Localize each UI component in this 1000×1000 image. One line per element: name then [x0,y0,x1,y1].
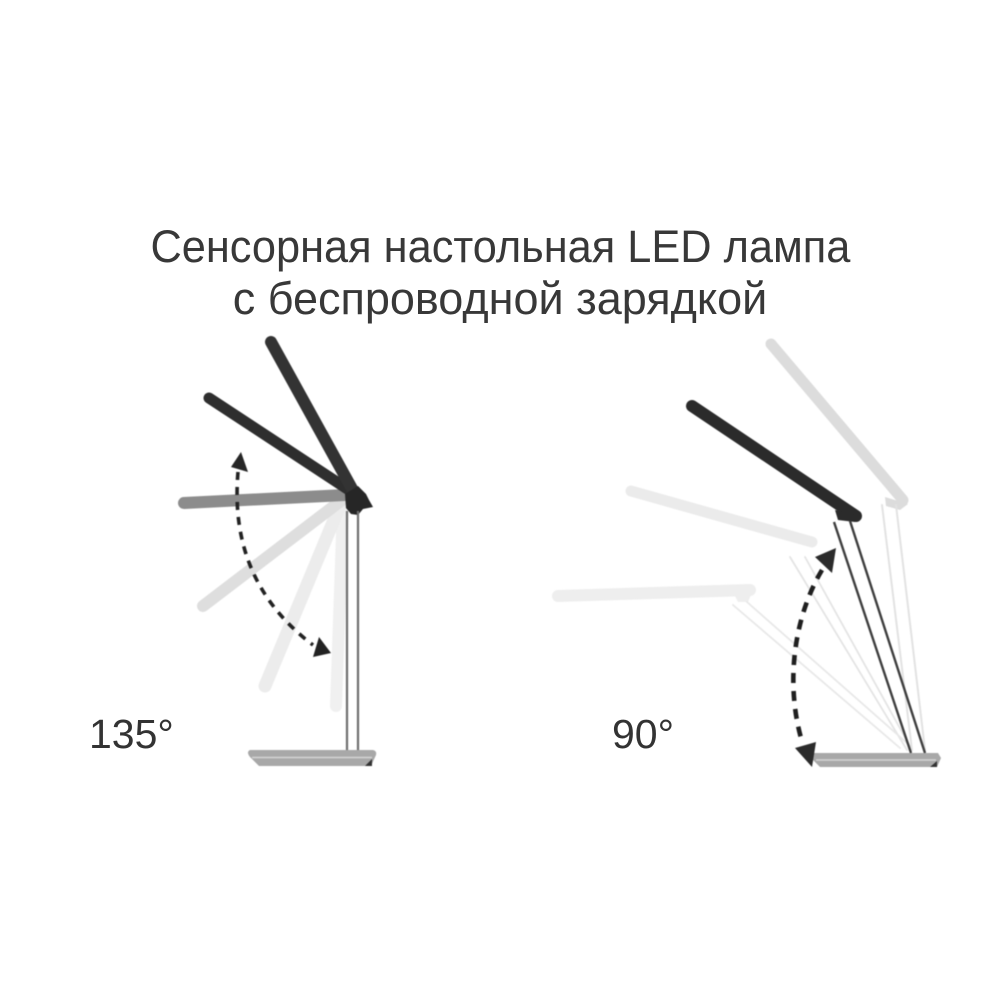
lamp 135: base [248,750,376,766]
lamp 135: arrow [231,452,331,657]
lamp 135: stand [347,511,358,751]
title: Сенсорная настольная LED лампа [150,221,850,272]
lamp 90: faded positions [558,344,925,750]
title: с беспроводной зарядкой [233,273,767,324]
title [150,221,850,324]
lamp 90: active position [692,406,925,753]
angle label 135: 135° [89,711,174,757]
angle label 90: 90° [612,711,674,757]
lamp 90: arrow [793,548,836,767]
lamp 90: base [812,753,941,767]
lamp 135: joint [345,486,373,515]
lamp 135: dark arm positions [184,342,356,503]
lamp 135: faded positions [203,500,343,706]
